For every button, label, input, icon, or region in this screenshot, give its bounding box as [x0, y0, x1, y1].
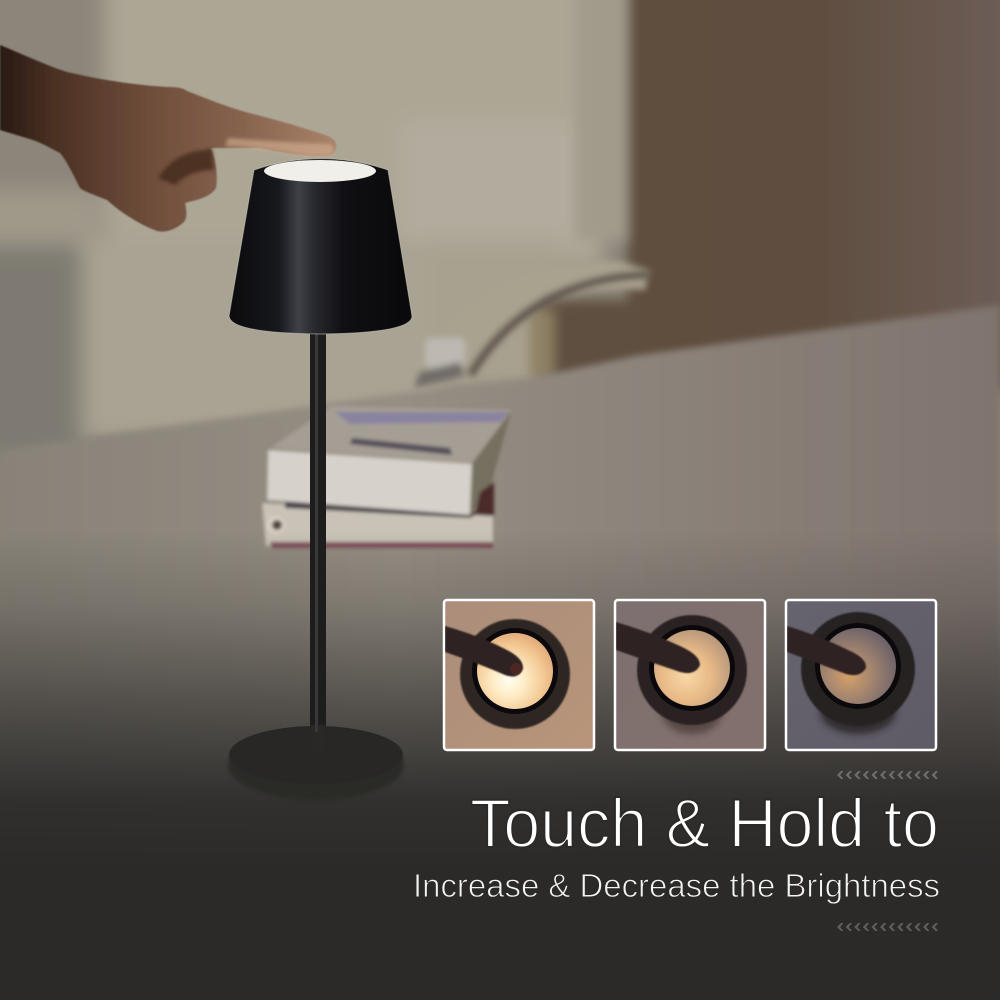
lit top — [264, 160, 376, 182]
chevron row bottom — [837, 923, 938, 931]
finger underside light — [225, 138, 334, 156]
brightness step 2 thumbnail — [615, 600, 765, 750]
lamp base — [228, 726, 404, 800]
table top surface — [0, 305, 1000, 1000]
lamp stem — [310, 332, 326, 752]
lamp shade — [229, 158, 412, 334]
books — [262, 406, 511, 548]
chevron row top — [837, 771, 938, 779]
dimmer ring — [460, 619, 570, 729]
brightness step 1 thumbnail — [444, 600, 594, 750]
curled fingers shadow — [158, 148, 214, 185]
lamp — [228, 158, 412, 800]
upper book — [267, 406, 511, 516]
title: Touch & Hold to — [470, 785, 939, 862]
brightness step 3 thumbnail — [786, 600, 936, 750]
lower book — [262, 500, 493, 548]
chair arm — [414, 261, 650, 388]
hand pointing at lamp — [0, 45, 336, 232]
glow — [477, 633, 553, 709]
finger — [445, 626, 523, 677]
bottom dark gradient — [0, 530, 1000, 1000]
subtitle: Increase & Decrease the Brightness — [413, 867, 940, 904]
